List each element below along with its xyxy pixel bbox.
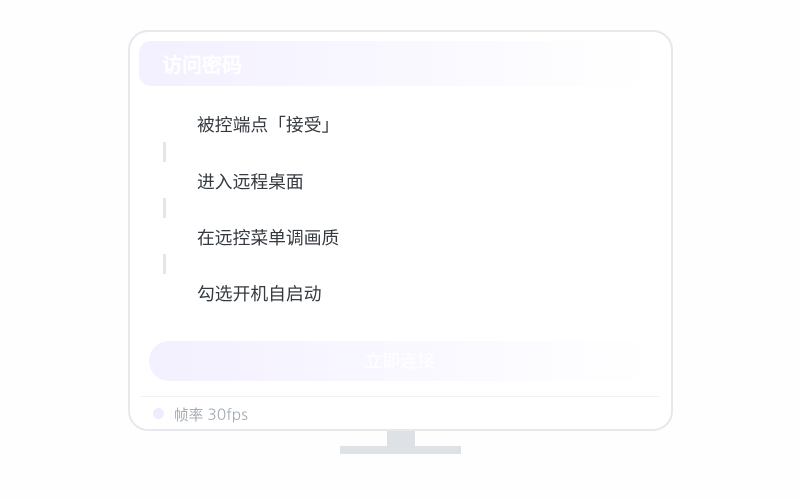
step 4: 勾选开机自启动 <box>197 284 321 304</box>
screen panel <box>128 30 673 431</box>
step connector 1 <box>163 142 166 162</box>
header bar <box>139 41 651 86</box>
step 2: 进入远程桌面 <box>197 172 304 192</box>
step connector 3 <box>163 254 166 274</box>
step connector 2 <box>163 198 166 218</box>
monitor stand base <box>340 446 461 454</box>
step 3: 在远控菜单调画质 <box>197 228 339 248</box>
connect button <box>149 341 651 381</box>
footer divider <box>140 396 660 397</box>
status dot <box>153 408 164 419</box>
status text: 帧率 30fps <box>174 408 248 424</box>
step 1: 被控端点「接受」 <box>197 115 339 135</box>
monitor stand neck <box>387 430 415 446</box>
connect button: 立即连接 <box>365 351 435 371</box>
heading: 访问密码 <box>162 55 242 77</box>
